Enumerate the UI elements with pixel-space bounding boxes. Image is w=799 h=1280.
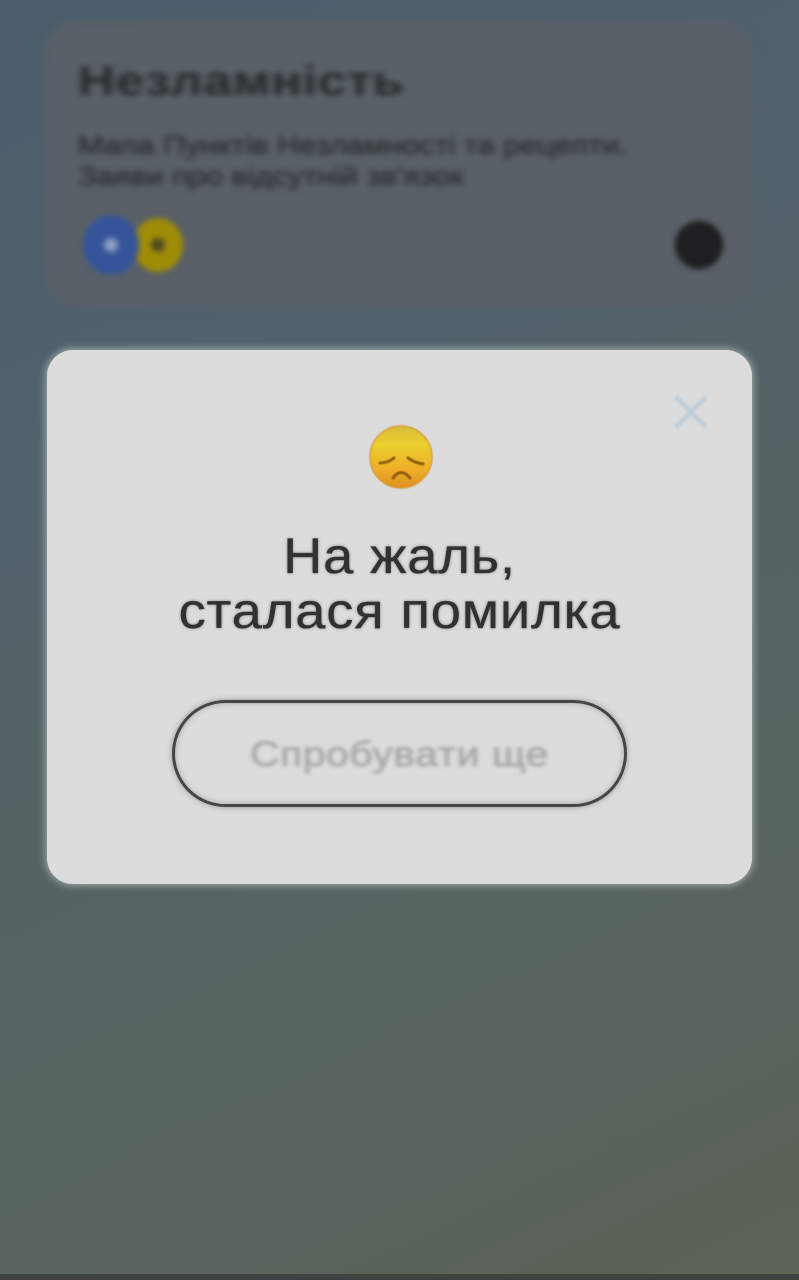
heading: error message	[179, 528, 622, 639]
text block: blurred card description: Заяви про відсутній зв'язок	[78, 161, 464, 191]
text block: blurred card description: Мапа Пунктів Незламності та рецепти.	[78, 130, 628, 160]
panel: error modal	[47, 350, 752, 884]
text block: blurred card description	[77, 130, 628, 192]
panel: blurred background card	[46, 22, 752, 306]
heading: error message: На жаль,	[283, 528, 516, 584]
heading: error message: сталася помилка	[179, 583, 620, 639]
heading: blurred card title: Незламність	[78, 57, 405, 104]
icon: disappointed face emoji	[368, 424, 434, 490]
bottom edge strip	[0, 1274, 799, 1280]
icon: dark arrow button	[675, 221, 723, 269]
button label: Спробувати ще	[250, 735, 549, 774]
button: try again	[172, 700, 627, 807]
icon: close cross	[674, 396, 708, 428]
icon: blue and yellow circles	[80, 212, 186, 278]
